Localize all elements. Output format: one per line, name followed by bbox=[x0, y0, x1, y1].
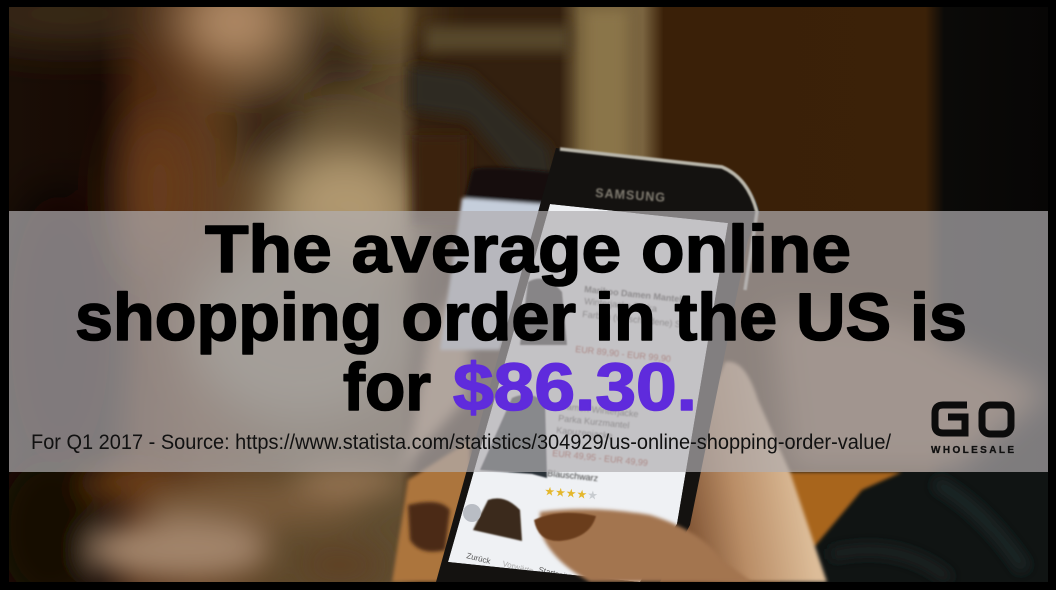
product: description text: Damen Winterjacke bbox=[560, 401, 639, 419]
logo letter G bbox=[935, 405, 967, 433]
product: description text: Marikoo Damen Mantel bbox=[584, 284, 682, 304]
photo: wood panelling and lamp bbox=[412, 10, 627, 225]
logo letter O bbox=[982, 405, 1011, 434]
photo: blurred phone reflection bbox=[440, 167, 556, 350]
product: description text: Kapuzenjacke bbox=[556, 425, 613, 441]
headline line 2: shopping order in the US is bbox=[75, 280, 967, 355]
headline line 1: The average online bbox=[205, 212, 851, 287]
headline line 3: price: $86.30. bbox=[453, 350, 697, 425]
photo: lower blurred skin bbox=[62, 462, 414, 582]
product: description text bbox=[547, 284, 682, 483]
photo: foreground finger with nail bbox=[534, 509, 752, 582]
phone body bbox=[436, 148, 760, 582]
screen nav labels: Vorwärts bbox=[502, 559, 534, 575]
logo wordmark: WHOLESALE bbox=[931, 445, 1014, 456]
phone metal rim bbox=[560, 149, 757, 290]
photo: left fingers holding phone bbox=[390, 298, 474, 582]
thumbnail menu dot bbox=[463, 504, 481, 522]
product: description text: Farben (verschiedene) S bbox=[582, 309, 681, 329]
photo: warm area right of phone behind band bbox=[770, 310, 1048, 472]
photo: back of hand right of phone bbox=[640, 362, 827, 582]
product: fur jacket thumbnail bbox=[473, 498, 522, 541]
SAMSUNG wordmark: SAMSUNG bbox=[595, 186, 667, 205]
screen nav labels bbox=[466, 552, 567, 574]
screen nav labels: Zurück bbox=[466, 551, 492, 566]
product: description text: Blauschwarz bbox=[547, 468, 599, 483]
product: description text: EUR 49,95 - EUR 49,99 bbox=[552, 448, 648, 468]
product: dark coat top bbox=[520, 279, 567, 345]
screen nav labels: Startseite bbox=[538, 565, 573, 582]
translucent text band bbox=[9, 211, 1048, 472]
product: description text: Winterjacke Parka bbox=[584, 296, 657, 314]
smartphone bbox=[436, 148, 760, 582]
product: description text: EUR 89,90 - EUR 99,90 bbox=[575, 344, 671, 364]
product: description text: Parka Kurzmantel bbox=[558, 413, 630, 430]
source note: For Q1 2017 - Source: https://www.statista.com/statistics/304929/us-online-shopping-order-value/ bbox=[31, 431, 891, 454]
photo: glasses arm bbox=[405, 66, 554, 172]
product: grey winter jacket bbox=[480, 395, 547, 478]
logo: GO Wholesale bbox=[931, 405, 1014, 456]
phone screen bbox=[448, 204, 728, 582]
product: star rating: ★★★★★ bbox=[544, 484, 599, 503]
headline bbox=[75, 212, 967, 425]
headline line 3: for: for bbox=[343, 350, 431, 425]
photo: dark clothing and orange table at lower right bbox=[780, 472, 1048, 582]
